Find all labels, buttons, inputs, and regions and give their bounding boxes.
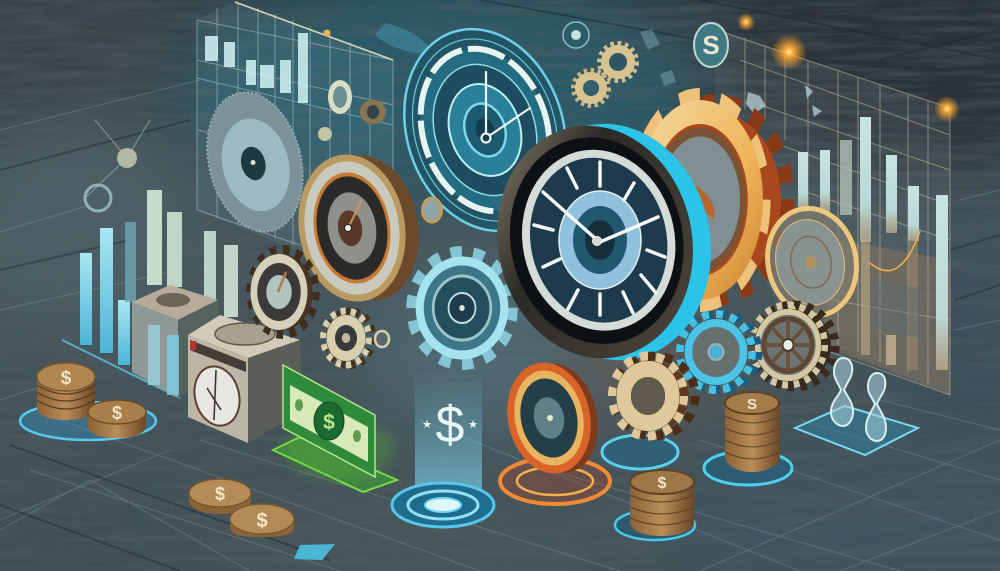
hologram: dollar beam and rings xyxy=(392,372,494,527)
hourglass pad xyxy=(795,406,918,455)
hologram: concentric disc xyxy=(193,82,317,242)
panel: left holographic glass chart xyxy=(197,2,430,290)
clock hands xyxy=(543,192,658,246)
glow ring: cyan under tall coin stack xyxy=(704,451,792,485)
bar chart: left floor bars xyxy=(62,120,238,398)
gear: cream and brown xyxy=(612,356,695,436)
dollar banknote xyxy=(283,365,375,477)
gear: cream lower xyxy=(574,71,608,105)
dollar sign: $ xyxy=(436,396,465,454)
clock hands on hologram dial xyxy=(482,72,530,142)
glow ring: cyan under gear xyxy=(602,435,678,469)
dollar banknote: $ xyxy=(323,411,335,434)
gear: cream top xyxy=(600,44,636,80)
coin stack: bottom centre xyxy=(630,470,694,536)
hourglass: left xyxy=(831,358,853,426)
small gears: top centre xyxy=(563,22,676,105)
hologram: dollar beam and rings: ★ xyxy=(468,419,478,431)
gear: small cream xyxy=(323,311,373,365)
glow ring: cyan under bottom coin stack xyxy=(615,510,695,540)
coin badge: top right: S xyxy=(702,30,720,60)
hologram: glowing cyan gear xyxy=(412,252,512,364)
hologram: small dial in chart xyxy=(328,80,352,114)
coin stack: tall left xyxy=(37,363,95,420)
box: front safe with clock face xyxy=(188,315,303,443)
coin stack: short left: $ xyxy=(112,403,122,423)
cyan rim xyxy=(491,105,733,379)
coin: floor left xyxy=(189,479,251,514)
panel: right holographic glass chart xyxy=(715,28,950,395)
gear: dark bronze spoked xyxy=(751,305,835,387)
hologram: large teal clock dial xyxy=(379,8,591,252)
coin stack: tall right: S xyxy=(747,396,757,413)
coin stack: tall left: $ xyxy=(61,368,72,389)
coin stack: short left xyxy=(88,400,146,438)
hour ticks xyxy=(534,162,665,315)
gear: cyan xyxy=(680,314,758,390)
coin: floor right xyxy=(230,504,294,537)
light glows xyxy=(737,13,960,122)
coin: floor left: $ xyxy=(215,484,225,504)
coin stack: tall right xyxy=(725,392,780,472)
gear: left bronze clock gear xyxy=(250,250,316,334)
inner dial xyxy=(559,191,641,289)
small cyan floor tile xyxy=(294,544,335,560)
gear: hologram outline xyxy=(563,22,589,48)
cyan glow ring under left coins xyxy=(20,402,156,440)
clock: golden glass xyxy=(758,200,866,324)
box: rear safe with dial xyxy=(132,285,218,398)
gear: large orange xyxy=(634,96,787,304)
coin badge: top right xyxy=(694,23,728,67)
clock: bronze left xyxy=(288,147,429,309)
clock: orange xyxy=(497,355,608,481)
small ring xyxy=(422,198,442,222)
coin: floor right: $ xyxy=(256,510,268,532)
hologram: small gear in chart xyxy=(318,100,386,141)
hourglass: right xyxy=(866,373,886,441)
ring small by gear xyxy=(375,331,389,347)
hologram: dollar beam and rings: ★ xyxy=(422,419,432,431)
green floor glow xyxy=(273,420,397,492)
coin stack: bottom centre: $ xyxy=(658,475,667,492)
clock: main large black clock xyxy=(476,105,733,379)
glow ring: orange xyxy=(500,458,610,504)
